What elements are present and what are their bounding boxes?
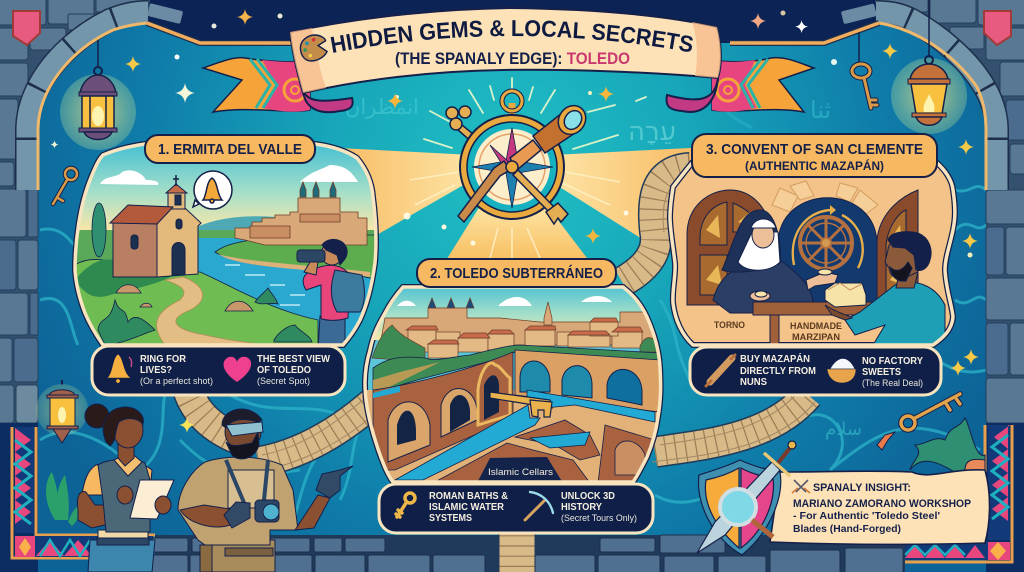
insight text: - For Authentic 'Toledo Steel' xyxy=(793,510,940,522)
stars xyxy=(50,9,979,433)
best view text: THE BEST VIEW xyxy=(257,353,330,365)
handmade label: MARZIPAN xyxy=(792,332,840,342)
key lower right xyxy=(513,170,568,224)
panel 1: Ermita del Valle xyxy=(70,135,380,395)
heraldic shield on right wall xyxy=(984,11,1011,45)
key lower right xyxy=(901,394,960,430)
faint Arabic script: انمظران xyxy=(345,95,419,119)
heraldic shield on left wall xyxy=(13,11,40,45)
key left xyxy=(53,168,77,204)
panel 1 scene xyxy=(70,140,380,350)
arches right xyxy=(520,361,642,405)
counter xyxy=(752,302,872,344)
arches left xyxy=(388,389,477,462)
panel 1 title pill xyxy=(145,135,315,163)
stone arch right xyxy=(730,3,997,190)
city xyxy=(372,298,660,362)
heart icon xyxy=(224,357,251,382)
man explorer xyxy=(178,409,353,572)
crossed swords icon xyxy=(792,480,810,493)
panel 3: Convent of San Clemente xyxy=(670,134,955,395)
chapel xyxy=(110,175,201,277)
small orange key xyxy=(877,432,895,450)
roman baths text: SYSTEMS xyxy=(429,512,472,524)
panel 1 title pill: 1. ERMITA DEL VALLE xyxy=(158,141,302,158)
sun rays behind the compass xyxy=(300,146,730,262)
bow xyxy=(508,103,516,114)
key icon xyxy=(396,493,415,517)
bell bubble xyxy=(193,171,232,209)
insight text: MARIANO ZAMORANO WORKSHOP xyxy=(793,498,971,510)
no factory text: SWEETS xyxy=(862,366,901,378)
buy directly text: BUY MAZAPÁN xyxy=(740,352,810,365)
best view text: OF TOLEDO xyxy=(257,364,311,376)
explorers xyxy=(77,404,353,572)
unlock history text: HISTORY xyxy=(561,501,602,513)
ring for lives text: LIVES? xyxy=(140,364,172,376)
map lines xyxy=(40,100,986,530)
unlock history text xyxy=(561,490,637,524)
rolling pin icon xyxy=(706,355,735,386)
trees xyxy=(92,203,106,257)
wooden door left xyxy=(687,190,770,305)
woman explorer xyxy=(77,404,174,572)
key hanging right xyxy=(852,33,877,108)
banner curls xyxy=(303,78,718,112)
opposite bank xyxy=(215,235,380,280)
roman baths text xyxy=(429,490,508,524)
key upper left xyxy=(446,106,478,144)
main title: HIDDEN GEMS & LOCAL SECRETS xyxy=(330,20,693,53)
ring for lives text: RING FOR xyxy=(140,353,186,365)
no factory text: (The Real Deal) xyxy=(862,378,923,389)
panel 3 title pill xyxy=(692,134,937,177)
plant left xyxy=(46,472,88,526)
customer xyxy=(825,232,945,350)
panel 2 info bar xyxy=(379,484,653,533)
compass rose xyxy=(506,128,518,167)
stone wall bottom xyxy=(150,535,905,572)
ring for lives text xyxy=(140,353,213,387)
sandy wall right xyxy=(515,350,660,412)
ribbon left xyxy=(203,58,310,112)
wheel xyxy=(800,217,852,269)
castle city xyxy=(235,182,367,245)
panel 2 scene xyxy=(366,288,659,480)
rocks xyxy=(116,285,253,311)
subtitle: (THE SPANALY EDGE): TOLEDO xyxy=(395,50,630,68)
lower rooms xyxy=(433,420,655,483)
marzipan box xyxy=(825,283,866,307)
no factory text xyxy=(862,355,923,389)
ground xyxy=(366,390,657,480)
panel 2 cream rim xyxy=(365,287,661,482)
panel 3 title pill: (AUTHENTIC MAZAPÁN) xyxy=(745,158,884,173)
lantern left xyxy=(60,40,136,150)
unlock history text: UNLOCK 3D xyxy=(561,490,615,502)
panel 2 frame xyxy=(365,287,661,482)
best view text xyxy=(257,353,330,387)
bell icon xyxy=(107,354,132,383)
telescope xyxy=(458,100,591,222)
panel 3 frame xyxy=(670,163,955,345)
buy directly text: NUNS xyxy=(740,376,767,388)
best view text: (Secret Spot) xyxy=(257,376,310,387)
buy directly text: DIRECTLY FROM xyxy=(740,365,816,377)
title banner xyxy=(289,7,722,114)
banner shading xyxy=(290,22,721,93)
river highlights xyxy=(225,265,305,305)
photographer xyxy=(297,239,364,350)
lantern lower left xyxy=(36,380,88,443)
green strip xyxy=(373,345,660,395)
insight scroll xyxy=(770,470,990,544)
cellars label: Islamic Cellars xyxy=(488,467,553,478)
brick wall left xyxy=(373,352,513,470)
faint Hebrew script: עֵרָה xyxy=(628,117,676,147)
no factory text: NO FACTORY xyxy=(862,355,923,367)
roman baths text: ISLAMIC WATER xyxy=(429,501,504,513)
handmade label xyxy=(790,322,842,340)
labels: TORNO xyxy=(714,320,745,330)
Spanaly insight callout xyxy=(697,441,990,555)
golden key xyxy=(490,392,552,417)
panel 3 cream rim xyxy=(670,163,955,345)
unlock history text: (Secret Tours Only) xyxy=(561,513,637,524)
panel 3 info bar xyxy=(690,347,941,395)
pickaxe icon xyxy=(525,492,553,520)
cobblestone roads xyxy=(188,168,815,572)
green foreground xyxy=(70,259,318,350)
stone wall right xyxy=(875,0,1024,423)
roman baths text: ROMAN BATHS & xyxy=(429,490,508,502)
faint Arabic script lower: سلام xyxy=(825,419,862,440)
plant right xyxy=(910,418,985,475)
torno opening xyxy=(778,198,877,305)
burst lines xyxy=(424,78,646,149)
panel 3 title pill: 3. CONVENT OF SAN CLEMENTE xyxy=(706,141,923,158)
stone wall left xyxy=(0,0,150,423)
panel 1 frame xyxy=(75,144,376,345)
panel 2 title pill xyxy=(417,259,616,287)
grass fronds xyxy=(98,288,312,345)
winding path xyxy=(157,277,265,345)
insight text: SPANALY INSIGHT: xyxy=(813,482,911,494)
panel 2 title pill: 2. TOLEDO SUBTERRÁNEO xyxy=(430,265,603,282)
faint Arabic script right: ثنا xyxy=(810,96,831,124)
insight text: Blades (Hand-Forged) xyxy=(793,523,901,535)
nun xyxy=(713,210,838,313)
palette icon xyxy=(299,34,328,62)
wooden door right xyxy=(877,190,918,305)
patterned frame bottom left xyxy=(0,423,155,572)
handmade label: HANDMADE xyxy=(790,321,842,331)
banner scroll xyxy=(290,8,721,93)
compass ring xyxy=(460,115,564,219)
buy directly text xyxy=(740,352,816,388)
stone arch xyxy=(772,181,878,214)
patterned frame bottom right xyxy=(905,423,1024,572)
panel 3 scene xyxy=(687,181,945,350)
ribbon right xyxy=(712,58,814,112)
compass and crossed keys xyxy=(424,78,646,224)
stone arch left xyxy=(27,3,295,190)
shield and sword xyxy=(697,441,796,555)
panel 1 cream rim xyxy=(75,144,376,345)
ring for lives text: (Or a perfect shot) xyxy=(140,376,213,387)
water channel xyxy=(395,405,540,480)
panel 1 info bar xyxy=(92,346,345,395)
lantern right xyxy=(891,0,967,134)
bowl icon xyxy=(827,358,856,383)
panel 2: Toledo Subterraneo xyxy=(360,259,665,533)
insight text xyxy=(793,482,971,535)
